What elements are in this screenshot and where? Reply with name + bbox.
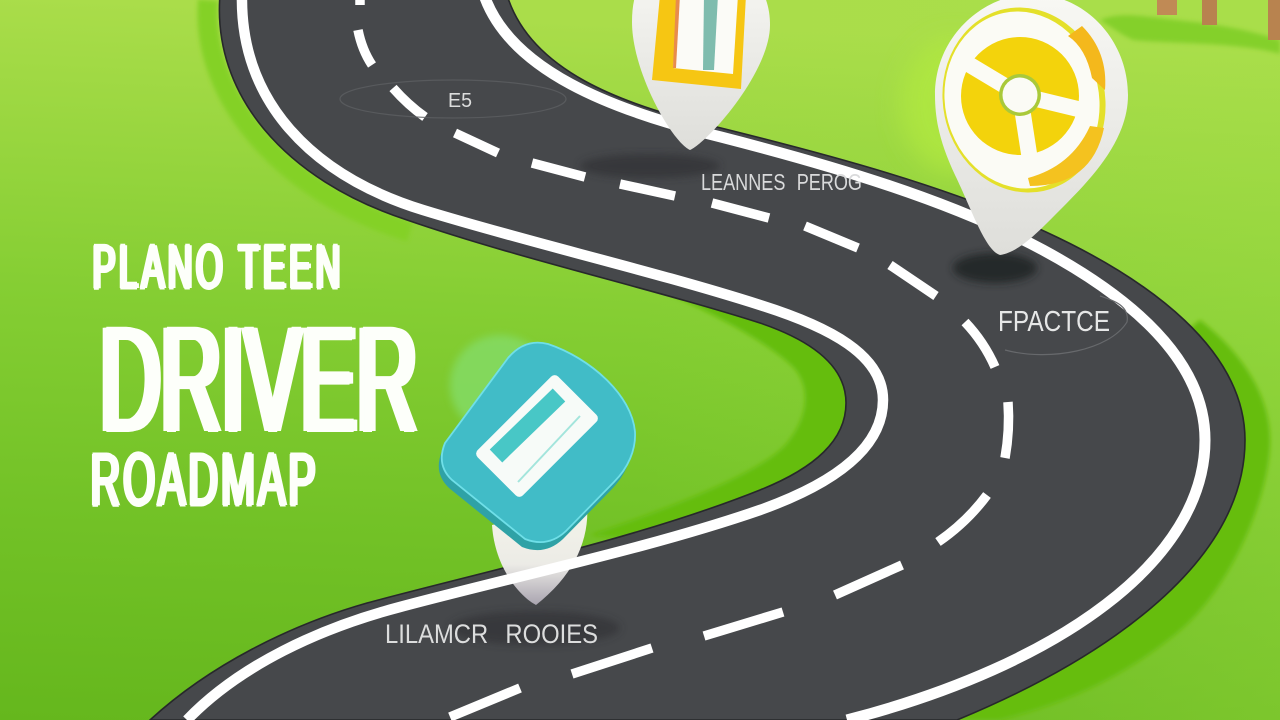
- title line: plano teen: PLANO TEEN: [92, 232, 343, 302]
- title line: roadmap: ROADMAP: [90, 438, 318, 521]
- wheel centre: [961, 37, 1079, 155]
- dashed centre line: [358, 0, 1009, 717]
- glow behind steering wheel pin: [900, 37, 1010, 173]
- sign face: [442, 343, 635, 542]
- teal pin stem: [492, 503, 587, 605]
- pin: steering wheel: [925, 0, 1128, 255]
- yellow document frame: [652, 0, 746, 89]
- wheel spokes: [965, 62, 1082, 160]
- title: [90, 232, 418, 521]
- label: ES: E5: [448, 90, 472, 112]
- wheel hub: [999, 74, 1041, 116]
- glow behind teal sign: [450, 335, 550, 435]
- teal document stripe: [703, 0, 718, 70]
- road edge line: outer: [484, 0, 1205, 720]
- title line: driver: DRIVER: [100, 295, 417, 463]
- pin body: [632, 0, 770, 150]
- label: learner period: LEANNES PEROG: [701, 169, 862, 195]
- white document page: [673, 0, 738, 74]
- label: practice: [998, 296, 1127, 355]
- white licence card: [474, 373, 600, 499]
- pin body: [935, 0, 1128, 255]
- pin shadows on road: [580, 154, 720, 178]
- teal card stripe: [496, 395, 559, 456]
- pin: document: [632, 0, 770, 150]
- road edge line: inner: [187, 0, 883, 720]
- wheel rim: [925, 0, 1123, 208]
- orange rim accents: [1068, 26, 1105, 90]
- label: learner rookies: LILAMCR ROOIES: [385, 619, 598, 649]
- label: practice: FPACTCE: [998, 306, 1110, 338]
- pin: teal licence sign: [439, 343, 635, 550]
- card text line: [518, 416, 580, 482]
- label: ES: [340, 80, 566, 118]
- trees at top right: [1100, 0, 1280, 54]
- sign thickness: [439, 351, 632, 550]
